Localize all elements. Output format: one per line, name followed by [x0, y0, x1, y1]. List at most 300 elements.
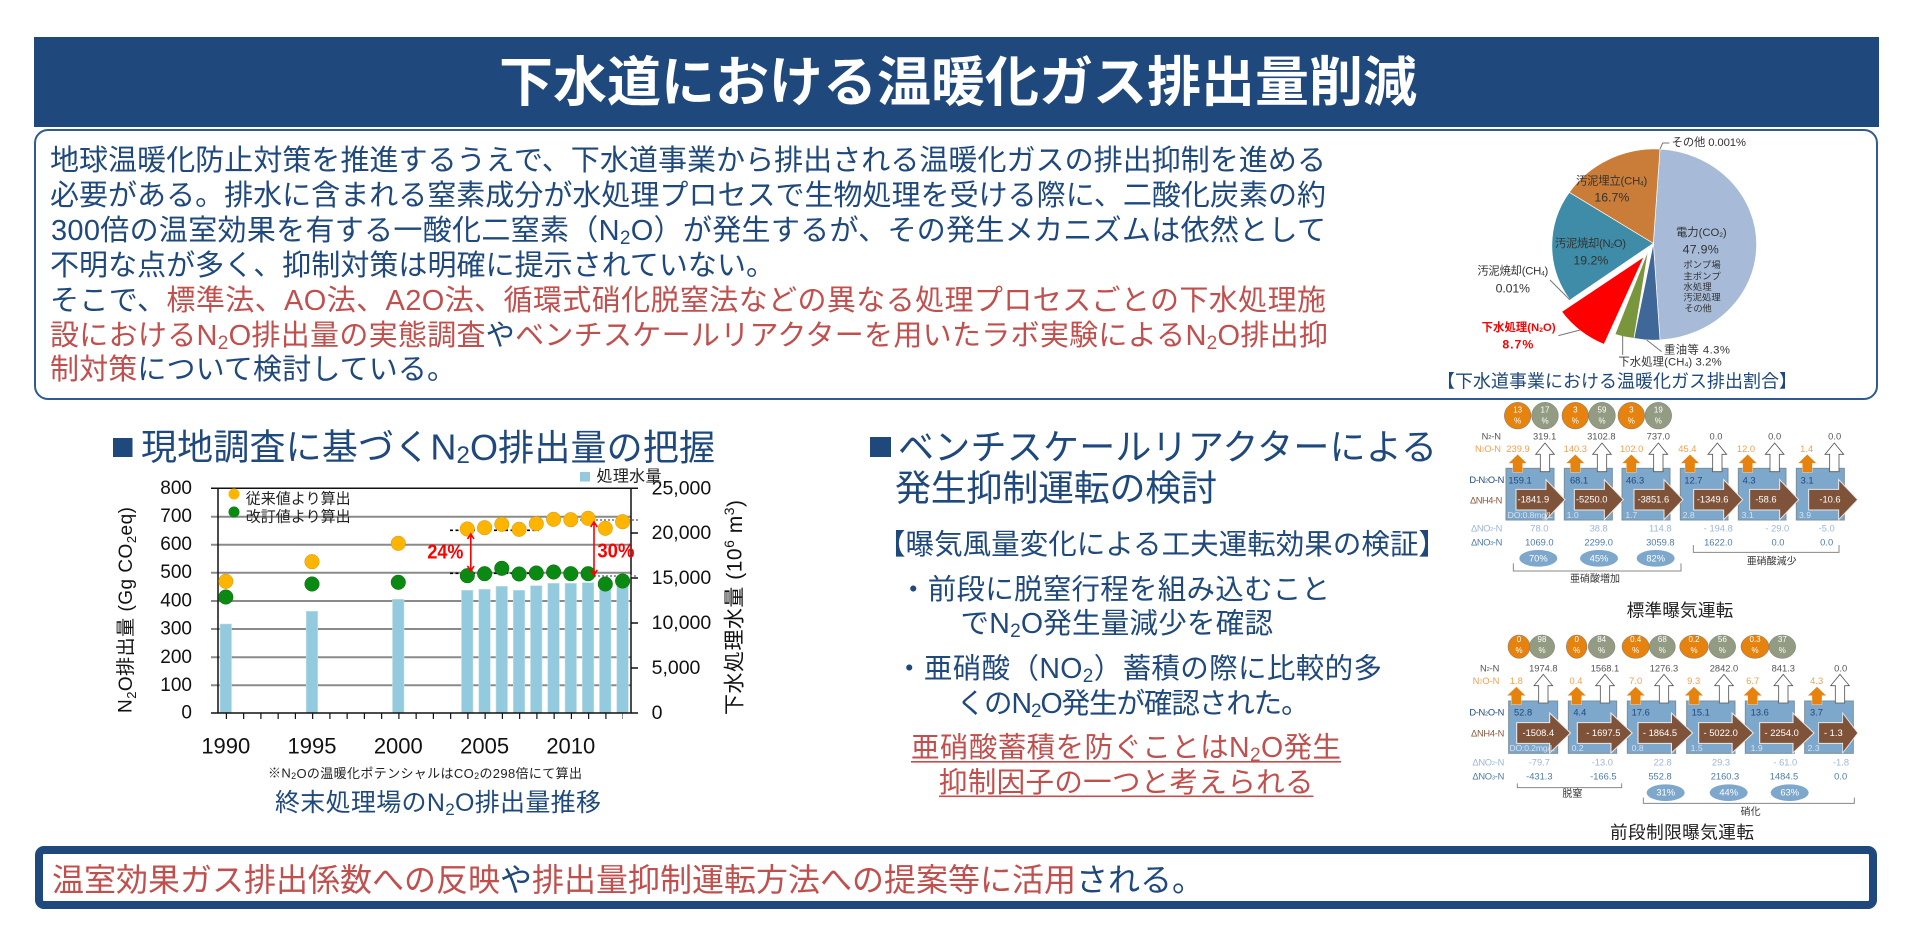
nitrite values: 29.3 — [1712, 757, 1730, 767]
left axis labels: 500 — [160, 562, 192, 583]
flow diagram: standard aeration — [1469, 402, 1858, 621]
DO values — [1509, 743, 1820, 753]
N2 values: 3102.8 — [1587, 431, 1616, 441]
pie labels: その他 0.001% — [1672, 136, 1746, 149]
row labels — [1469, 663, 1504, 782]
heading: field survey: 2 — [456, 442, 470, 468]
pie labels: 2 — [1719, 231, 1723, 238]
ammonium arrows — [1516, 480, 1858, 520]
right axis labels: 5,000 — [652, 657, 701, 679]
dissolved N2O values: 68.1 — [1570, 475, 1588, 485]
flow diagram: restricted aeration: % — [1719, 646, 1726, 655]
pie labels: 重油等 4.3% — [1664, 343, 1730, 357]
leader lines — [1550, 143, 1669, 355]
flow diagram: restricted aeration: % — [1779, 646, 1786, 655]
pie labels: O) — [1614, 238, 1626, 250]
nitrate values: 3059.8 — [1646, 537, 1675, 547]
text block: background and objectives — [50, 144, 1328, 386]
callout: conclusion — [911, 732, 1341, 799]
row labels: O-N — [1488, 708, 1504, 718]
text block: aeration verification: でN — [960, 608, 1010, 640]
chart footnote: の298倍にて算出 — [479, 766, 582, 780]
N2O values — [1506, 444, 1813, 454]
nitrite values: 22.8 — [1654, 757, 1672, 767]
row labels: 2 — [1485, 711, 1488, 717]
DO values: 1.5 — [1691, 743, 1703, 753]
flow diagram: standard aeration: % — [1628, 416, 1635, 425]
text block: background and objectives: そこで、標準法、AO法、A2O法、循環式硝化脱窒法などの異なる処理プロセスごとの下水処理施 — [50, 284, 1326, 317]
axes — [211, 488, 638, 716]
ammonium values: -1349.6 — [1697, 495, 1728, 505]
pie labels: 0.01% — [1496, 281, 1530, 295]
dissolved N2O values: 17.6 — [1632, 708, 1650, 718]
right axis labels: 10,000 — [652, 612, 711, 634]
brackets: 硝化 — [1741, 805, 1761, 818]
chart footnote: 2 — [474, 771, 479, 781]
N2O values: 7.0 — [1629, 676, 1642, 686]
row labels: N — [1480, 663, 1487, 673]
N2 values: 319.1 — [1533, 431, 1556, 441]
row labels: 3 — [1490, 541, 1493, 547]
N2 values: 737.0 — [1647, 431, 1670, 441]
year labels: 2010 — [546, 734, 595, 758]
pie caption: 【下水道事業における温暖化ガス排出割合】 — [1437, 372, 1797, 392]
flow diagram: restricted aeration: 0.3 — [1749, 635, 1761, 644]
row labels: ΔNH4-N — [1470, 495, 1502, 505]
percentage circles — [1508, 635, 1796, 658]
N2O values: 9.3 — [1687, 676, 1700, 686]
right axis labels: 25,000 — [652, 477, 711, 499]
pie labels: ) — [1644, 176, 1648, 188]
row labels: 2 — [1481, 448, 1485, 454]
row labels: ΔNO — [1472, 772, 1492, 782]
row labels: N — [1475, 444, 1482, 454]
row labels: D-N — [1469, 475, 1485, 485]
flow diagram: restricted aeration: 0.2 — [1688, 635, 1700, 644]
flow diagram: restricted aeration — [1469, 635, 1858, 842]
dissolved N2O values: 4.4 — [1573, 708, 1586, 718]
title banner: 下水道における温暖化ガス排出量削減 — [499, 53, 1417, 113]
nitrate values: 0.0 — [1772, 537, 1784, 547]
pie labels: 汚泥埋立(CH — [1576, 176, 1640, 188]
text block: background and objectives: 300倍の温室効果を有する一酸化二窒素（N — [51, 215, 620, 247]
nitrate values: 2299.0 — [1584, 537, 1613, 547]
row labels: 2 — [1487, 667, 1490, 673]
row labels: ΔNO — [1471, 523, 1490, 533]
reactor boxes — [1509, 701, 1853, 753]
efficiency ellipses — [1647, 784, 1809, 801]
N2O values: 4.3 — [1810, 676, 1823, 686]
text block: background and objectives: 2 — [1207, 332, 1217, 354]
nitrite values: - 61.0 — [1773, 757, 1797, 767]
left axis title: 2 — [124, 692, 138, 699]
text block: background and objectives: 制対策について検討している。 — [50, 353, 456, 386]
brackets: 亜硝酸減少 — [1747, 554, 1797, 567]
dissolved N2O values: 3.7 — [1810, 708, 1823, 718]
row labels: N — [1482, 431, 1488, 441]
flow diagram: restricted aeration: % — [1515, 646, 1523, 655]
pie labels: その他 — [1684, 302, 1712, 313]
chart: N2O emissions and treated water volume — [114, 468, 746, 758]
ammonium values: -10.6 — [1819, 495, 1841, 505]
efficiency ellipses: 31% — [1656, 788, 1675, 798]
flow diagram: restricted aeration: 0 — [1517, 635, 1522, 644]
N2O arrows — [1507, 687, 1826, 705]
row labels: -N — [1490, 663, 1499, 673]
percentage circles — [1504, 402, 1672, 429]
right axis labels — [652, 477, 711, 724]
callout: conclusion: 2 — [1250, 744, 1261, 766]
ammonium values: -58.6 — [1755, 495, 1777, 505]
text block: aeration verification: ・亜硝酸（NO — [895, 653, 1082, 685]
nitrite values: -13.0 — [1592, 757, 1613, 767]
row labels: 2 — [1490, 527, 1493, 533]
N2O values: 140.3 — [1564, 444, 1587, 454]
efficiency ellipses: 45% — [1590, 553, 1608, 563]
N2O values: 1.8 — [1510, 676, 1523, 686]
brackets — [1513, 545, 1839, 585]
text block: aeration verification: 2 — [1083, 666, 1093, 686]
row labels: 2 — [1488, 435, 1491, 441]
DO values: DO:0.2mg/L — [1509, 743, 1555, 753]
nitrite values — [1529, 757, 1849, 767]
dissolved N2O values: 3.1 — [1801, 475, 1814, 485]
heading: bench scale reactor: ベンチスケールリアクターによる — [898, 426, 1437, 468]
dissolved N2O values — [1514, 708, 1823, 718]
heading: field survey: 現地調査に基づくN — [141, 426, 456, 468]
N2 values: 2842.0 — [1710, 663, 1738, 673]
year labels — [201, 734, 595, 758]
right axis title: m — [724, 516, 746, 540]
nitrate values: 0.0 — [1834, 772, 1847, 782]
DO values: 1.9 — [1751, 743, 1763, 753]
text block: background and objectives: ）が発生するが、その発生メカニズムは依然として — [654, 215, 1326, 247]
text block: aeration verification: くのN — [957, 688, 1032, 720]
ammonium values: - 1697.5 — [1586, 728, 1620, 738]
panel: introduction — [35, 130, 1877, 399]
flow diagram: standard aeration: 3 — [1573, 405, 1578, 414]
right axis title: 6 — [721, 540, 737, 548]
callout: conclusion: O発生 — [1261, 732, 1341, 764]
pie slices — [1552, 149, 1757, 344]
flow diagram: standard aeration: 59 — [1598, 405, 1607, 414]
N2O values: 45.4 — [1678, 444, 1696, 454]
text block: aeration verification — [877, 529, 1447, 722]
text block: background and objectives: O — [631, 215, 653, 247]
row labels: ΔNH4-N — [1471, 728, 1504, 738]
pie labels: ) 3.2% — [1688, 356, 1722, 368]
pie labels: 水処理 — [1683, 281, 1712, 292]
DO values: DO:0.8mg/L — [1508, 510, 1553, 520]
chart caption: O排出量推移 — [455, 789, 601, 817]
N2O values: 0.4 — [1570, 676, 1582, 686]
left axis title: O排出量 (Gg CO — [114, 544, 136, 691]
right axis labels: 15,000 — [652, 567, 711, 589]
ammonium values: -1841.9 — [1518, 495, 1549, 505]
pie labels: 47.9% — [1683, 243, 1719, 257]
ammonium arrows — [1517, 713, 1858, 753]
pie labels: ) — [1723, 227, 1727, 239]
chart footnote: Oの温暖化ポテンシャルはCO — [296, 766, 474, 780]
text block: aeration verification: O発生量減少を確認 — [1021, 608, 1273, 640]
efficiency ellipses: 82% — [1646, 553, 1665, 563]
panel: bottom conclusion: 温室効果ガス排出係数への反映や排出量抑制運転方法への提案等に活用される。 — [52, 862, 1204, 898]
text block: aeration verification: 【曝気風量変化による工夫運転効果の検証】 — [877, 529, 1447, 561]
reactor boxes — [1506, 468, 1844, 520]
N2 values: 0.0 — [1828, 431, 1841, 441]
flow diagram: restricted aeration: % — [1573, 646, 1580, 655]
left axis labels: 0 — [181, 702, 192, 724]
nitrite values: -5.0 — [1819, 523, 1835, 533]
row labels: O-N — [1488, 475, 1504, 485]
heading: field survey: O排出量の把握 — [470, 426, 715, 468]
text block: background and objectives: 2 — [218, 332, 228, 354]
pie labels: 電力(CO — [1676, 227, 1719, 239]
chart footnote: ※N — [268, 766, 291, 780]
flow diagram: restricted aeration: % — [1538, 646, 1546, 655]
left axis labels: 300 — [160, 618, 192, 640]
points: previous coefficient — [218, 511, 630, 589]
DO values: 1.0 — [1567, 510, 1579, 520]
row labels: O-N — [1482, 676, 1499, 686]
grid lines — [211, 517, 631, 685]
nitrite values: -79.7 — [1529, 757, 1550, 767]
nitrate values: 1484.5 — [1770, 772, 1798, 782]
text block: aeration verification: ）蓄積の際に比較的多 — [1094, 653, 1382, 685]
row labels: 2 — [1485, 479, 1488, 485]
text block: background and objectives: O排出抑 — [1218, 319, 1328, 352]
N2O values — [1510, 676, 1823, 686]
pie labels: 4 — [1541, 270, 1545, 277]
row labels: ΔNO — [1471, 537, 1490, 547]
pie labels: 下水処理(CH — [1618, 356, 1684, 368]
row labels — [1469, 431, 1504, 547]
flow diagram: standard aeration: 17 — [1541, 405, 1550, 414]
flow diagram: restricted aeration: % — [1690, 646, 1698, 655]
row labels: N — [1473, 676, 1479, 686]
pie labels: 下水処理(N — [1482, 322, 1539, 334]
left axis labels: 600 — [160, 534, 192, 555]
dashed reference lines — [450, 520, 638, 576]
flow diagram: restricted aeration: 0 — [1574, 635, 1579, 644]
nitrite values: - 29.0 — [1765, 523, 1789, 533]
pie labels: 汚泥処理 — [1683, 292, 1721, 303]
title banner — [34, 37, 1879, 127]
pie labels: 2 — [1539, 326, 1543, 333]
flow diagram: restricted aeration: % — [1751, 646, 1759, 655]
ammonium values: - 5022.0 — [1704, 728, 1738, 738]
row labels: 2 — [1479, 680, 1482, 686]
flow diagram: restricted aeration: 98 — [1538, 635, 1547, 644]
nitrate values: 1622.0 — [1704, 537, 1733, 547]
text block: aeration verification: 2 — [1010, 620, 1021, 642]
pie labels: 4 — [1640, 180, 1644, 187]
nitrate values — [1525, 537, 1833, 547]
efficiency ellipses — [1519, 550, 1675, 567]
pie labels: 2 — [1610, 242, 1614, 249]
N2 values: 1568.1 — [1591, 663, 1619, 673]
efficiency ellipses: 70% — [1529, 553, 1548, 563]
nitrate values: -166.5 — [1590, 772, 1617, 782]
diagram title: 標準曝気運転 — [1627, 601, 1734, 621]
callout: conclusion: 亜硝酸蓄積を防ぐことはN — [911, 732, 1250, 764]
N2 values: 0.0 — [1834, 663, 1847, 673]
flow diagram: restricted aeration: % — [1632, 646, 1639, 655]
DO values: 3.9 — [1799, 510, 1811, 520]
right axis labels: 20,000 — [652, 522, 711, 544]
row labels: -N — [1495, 757, 1504, 767]
text block: background and objectives: O排出量の実態調査 — [229, 319, 486, 352]
dissolved N2O values: 159.1 — [1508, 475, 1532, 485]
efficiency ellipses: 63% — [1780, 788, 1799, 798]
row labels: ΔNO — [1472, 757, 1492, 767]
flow diagram: standard aeration: 19 — [1654, 405, 1663, 414]
heading: bench scale reactor: 発生抑制運転の検討 — [895, 468, 1217, 508]
text block: aeration verification: ・前段に脱窒行程を組み込むこと — [899, 574, 1330, 606]
points: revised coefficient — [218, 561, 630, 604]
nitrate values — [1526, 772, 1847, 782]
pie labels: 汚泥焼却(N — [1555, 238, 1611, 250]
nitrite values — [1530, 523, 1835, 533]
row labels: -N — [1491, 431, 1501, 441]
N2 values: 0.0 — [1768, 431, 1781, 441]
flow diagram: standard aeration: % — [1514, 416, 1521, 425]
DO values: 3.1 — [1742, 510, 1754, 520]
N2O values: 6.7 — [1746, 676, 1759, 686]
N2 values: 0.0 — [1710, 431, 1722, 441]
dissolved N2O values — [1508, 475, 1814, 485]
ammonium values: - 2254.0 — [1765, 728, 1799, 738]
N2 values: 1276.3 — [1650, 663, 1678, 673]
row labels: -N — [1495, 772, 1504, 782]
chart caption: 終末処理場のN — [275, 789, 445, 817]
right axis title: 3 — [721, 507, 737, 515]
pie labels: 4 — [1685, 361, 1689, 368]
flow diagram: restricted aeration: 84 — [1597, 635, 1607, 644]
dissolved N2O values: 15.1 — [1692, 708, 1710, 718]
row labels: O-N — [1484, 444, 1501, 454]
N2O values: 239.9 — [1506, 444, 1530, 454]
ammonium values — [1518, 495, 1841, 505]
flow diagram: restricted aeration: 37 — [1778, 635, 1787, 644]
DO values: 0.8 — [1632, 743, 1644, 753]
N2 arrows — [1536, 443, 1844, 472]
row labels: -N — [1493, 537, 1502, 547]
heading: bench scale reactor — [870, 426, 1437, 508]
dissolved N2O values: 52.8 — [1514, 708, 1532, 718]
ammonium values: -1508.4 — [1523, 728, 1554, 738]
nitrate values: 2160.3 — [1711, 772, 1739, 782]
chart footnote: 2 — [291, 771, 296, 781]
flow diagram: restricted aeration: % — [1659, 646, 1666, 655]
N2O values: 102.0 — [1620, 444, 1643, 454]
nitrite values: -1.8 — [1833, 757, 1849, 767]
text block: background and objectives: 不明な点が多く、抑制対策は明確に提示されていない。 — [50, 249, 775, 282]
flow diagram: standard aeration: 3 — [1629, 405, 1634, 414]
left axis labels: 700 — [160, 506, 192, 527]
panel: bottom conclusion — [39, 850, 1873, 905]
legend: 処理水量 — [596, 468, 662, 486]
row labels: -N — [1493, 523, 1502, 533]
ammonium values: - 1.3 — [1824, 728, 1843, 738]
flow diagram: standard aeration: % — [1572, 416, 1579, 425]
text block: background and objectives: 2 — [620, 228, 630, 248]
pie labels: 16.7% — [1594, 190, 1629, 204]
text block: aeration verification: O発生が確認された。 — [1040, 688, 1310, 720]
DO values: 0.2 — [1572, 743, 1584, 753]
flow diagram: standard aeration: % — [1598, 416, 1606, 425]
ammonium values: - 1864.5 — [1643, 728, 1677, 738]
nitrate values: 552.8 — [1648, 772, 1672, 782]
year labels: 1990 — [201, 734, 250, 758]
text block: background and objectives: 必要がある。排水に含まれる窒素成分が水処理プロセスで生物処理を受ける際に、二酸化炭素の約 — [50, 179, 1326, 212]
N2 arrows — [1534, 674, 1849, 703]
year labels: 2000 — [374, 734, 423, 758]
N2 values: 1974.8 — [1529, 663, 1558, 673]
pie labels: 8.7% — [1502, 338, 1533, 352]
brackets: 亜硝酸増加 — [1570, 572, 1620, 585]
flow diagram: restricted aeration: % — [1598, 646, 1605, 655]
ammonium values: -5250.0 — [1576, 495, 1607, 505]
row labels: D-N — [1469, 708, 1485, 718]
left axis labels: 400 — [160, 590, 192, 612]
DO values: 2.8 — [1683, 510, 1695, 520]
callout: conclusion: 抑制因子の一つと考えられる — [939, 767, 1314, 799]
row labels: 3 — [1492, 775, 1495, 781]
brackets — [1517, 783, 1854, 818]
flow diagram: restricted aeration: 56 — [1718, 635, 1727, 644]
arrows: reduction — [468, 522, 597, 575]
label: 24 percent: 24% — [427, 542, 464, 564]
pie labels: 主ポンプ — [1683, 270, 1721, 281]
left axis title: N — [116, 699, 136, 713]
N2O arrows — [1508, 454, 1817, 472]
chart caption: 2 — [445, 800, 455, 818]
right axis title: ) — [724, 500, 746, 507]
nitrite values: - 194.8 — [1704, 523, 1733, 533]
bars: treated water volume — [220, 583, 628, 713]
ammonium values: -3851.6 — [1638, 495, 1669, 505]
heading: field survey — [113, 426, 715, 468]
pie chart: greenhouse gas share — [1437, 136, 1797, 392]
right axis labels: 0 — [652, 702, 663, 724]
pie labels: 汚泥焼却(CH — [1477, 266, 1541, 278]
brackets: 脱窒 — [1562, 787, 1582, 800]
flow diagram: restricted aeration: 0.4 — [1630, 635, 1642, 644]
left axis title: 2 — [124, 536, 138, 543]
pie labels — [1477, 136, 1746, 368]
flow diagram: restricted aeration: 68 — [1658, 635, 1667, 644]
legend — [228, 468, 662, 526]
nitrite values: 114.8 — [1649, 523, 1672, 533]
DO values — [1508, 510, 1811, 520]
nitrite values: 78.0 — [1530, 523, 1548, 533]
dissolved N2O values: 4.3 — [1743, 475, 1756, 485]
nitrite values: 38.8 — [1590, 523, 1608, 533]
N2 values — [1529, 663, 1847, 673]
flow diagram: standard aeration: 13 — [1513, 405, 1523, 414]
N2 values — [1533, 431, 1841, 441]
nitrate values: 0.0 — [1820, 537, 1833, 547]
left axis labels: 100 — [160, 675, 192, 696]
label: 30 percent: 30% — [597, 541, 635, 563]
text block: background and objectives: 設におけるN — [50, 320, 217, 352]
DO values: 1.7 — [1625, 510, 1638, 520]
legend: 従来値より算出 — [246, 490, 351, 508]
left axis labels: 800 — [160, 478, 192, 499]
nitrate values: 1069.0 — [1525, 537, 1554, 547]
dissolved N2O values: 46.3 — [1626, 475, 1644, 485]
